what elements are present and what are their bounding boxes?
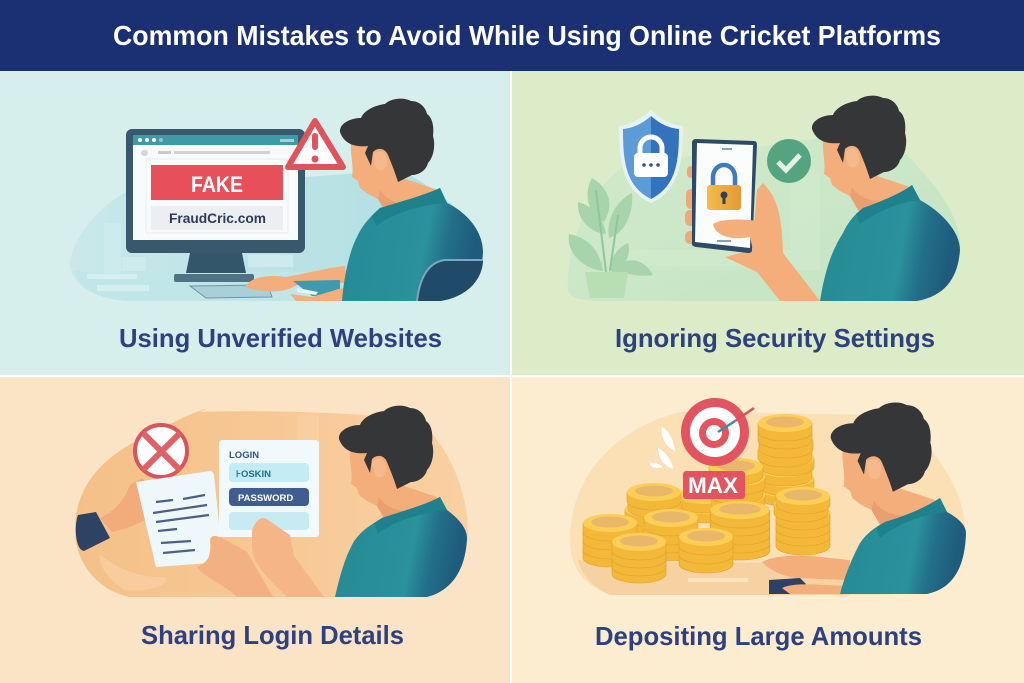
sleeve (76, 512, 110, 551)
ghost hand (100, 555, 166, 590)
login card: PASSWORD (238, 493, 293, 504)
prohibited circle icon (135, 425, 187, 477)
panel 1 illustration: fake website (70, 99, 483, 301)
header bar (0, 0, 1024, 71)
MAX label: MAX (688, 473, 738, 498)
palm below phone (725, 183, 820, 301)
caption: sharing login details: Sharing Login Details (141, 620, 404, 650)
background blob (70, 170, 483, 301)
coin stacks (583, 414, 830, 583)
hand holding document (197, 536, 273, 597)
FraudCric url box: FraudCric.com (169, 210, 266, 226)
desk notes (87, 274, 149, 291)
panel 4 illustration: large deposits (570, 398, 966, 595)
FraudCric url box (151, 206, 283, 230)
caption: ignoring security settings: Ignoring Security Settings (615, 323, 935, 353)
plant (569, 178, 653, 298)
panel background: login details (0, 377, 510, 683)
caption: using unverified websites: Using Unverified Websites (119, 323, 442, 353)
caption: depositing large amounts: Depositing Large Amounts (595, 621, 922, 651)
login card: ⊦OSKIN (236, 469, 271, 480)
login card (219, 440, 319, 537)
warning triangle icon (288, 121, 343, 167)
background blob (75, 408, 468, 597)
splash marks (649, 427, 675, 469)
person shirt (840, 498, 966, 594)
hand on card (252, 518, 324, 597)
panel background: unverified websites (0, 71, 510, 375)
lower arm (290, 288, 386, 301)
panel 2 illustration: security (568, 96, 960, 301)
person shirt (820, 185, 960, 301)
shield icon (619, 110, 683, 203)
FAKE banner: FAKE (191, 172, 243, 197)
person head (339, 406, 444, 523)
person head (340, 99, 445, 216)
person head (812, 96, 917, 213)
thumb on phone (713, 219, 770, 246)
phone in hand (769, 578, 806, 594)
fingers behind phone (685, 166, 698, 244)
person shirt (342, 188, 483, 301)
chair (417, 260, 483, 301)
panel 3 illustration: sharing login (75, 406, 468, 597)
FAKE banner (151, 165, 283, 200)
target icon (681, 398, 754, 466)
person head (831, 403, 943, 528)
background blob (570, 412, 965, 595)
login card: LOGIN (229, 450, 259, 461)
keyboard (190, 285, 272, 298)
hand (762, 556, 850, 580)
monitor (126, 129, 305, 282)
check circle icon (767, 139, 811, 183)
phone (692, 139, 757, 253)
upper hand (245, 266, 347, 291)
title: Common Mistakes to Avoid While Using Online Cricket Platforms (113, 20, 941, 51)
panel background: large amounts (512, 377, 1024, 683)
monitor stand (186, 253, 246, 273)
hand left (100, 478, 160, 532)
padlock (707, 165, 741, 210)
document (136, 471, 223, 567)
background blob (568, 130, 960, 301)
panel background: security settings (512, 71, 1024, 375)
tablet (293, 280, 340, 296)
person shirt (335, 497, 467, 597)
